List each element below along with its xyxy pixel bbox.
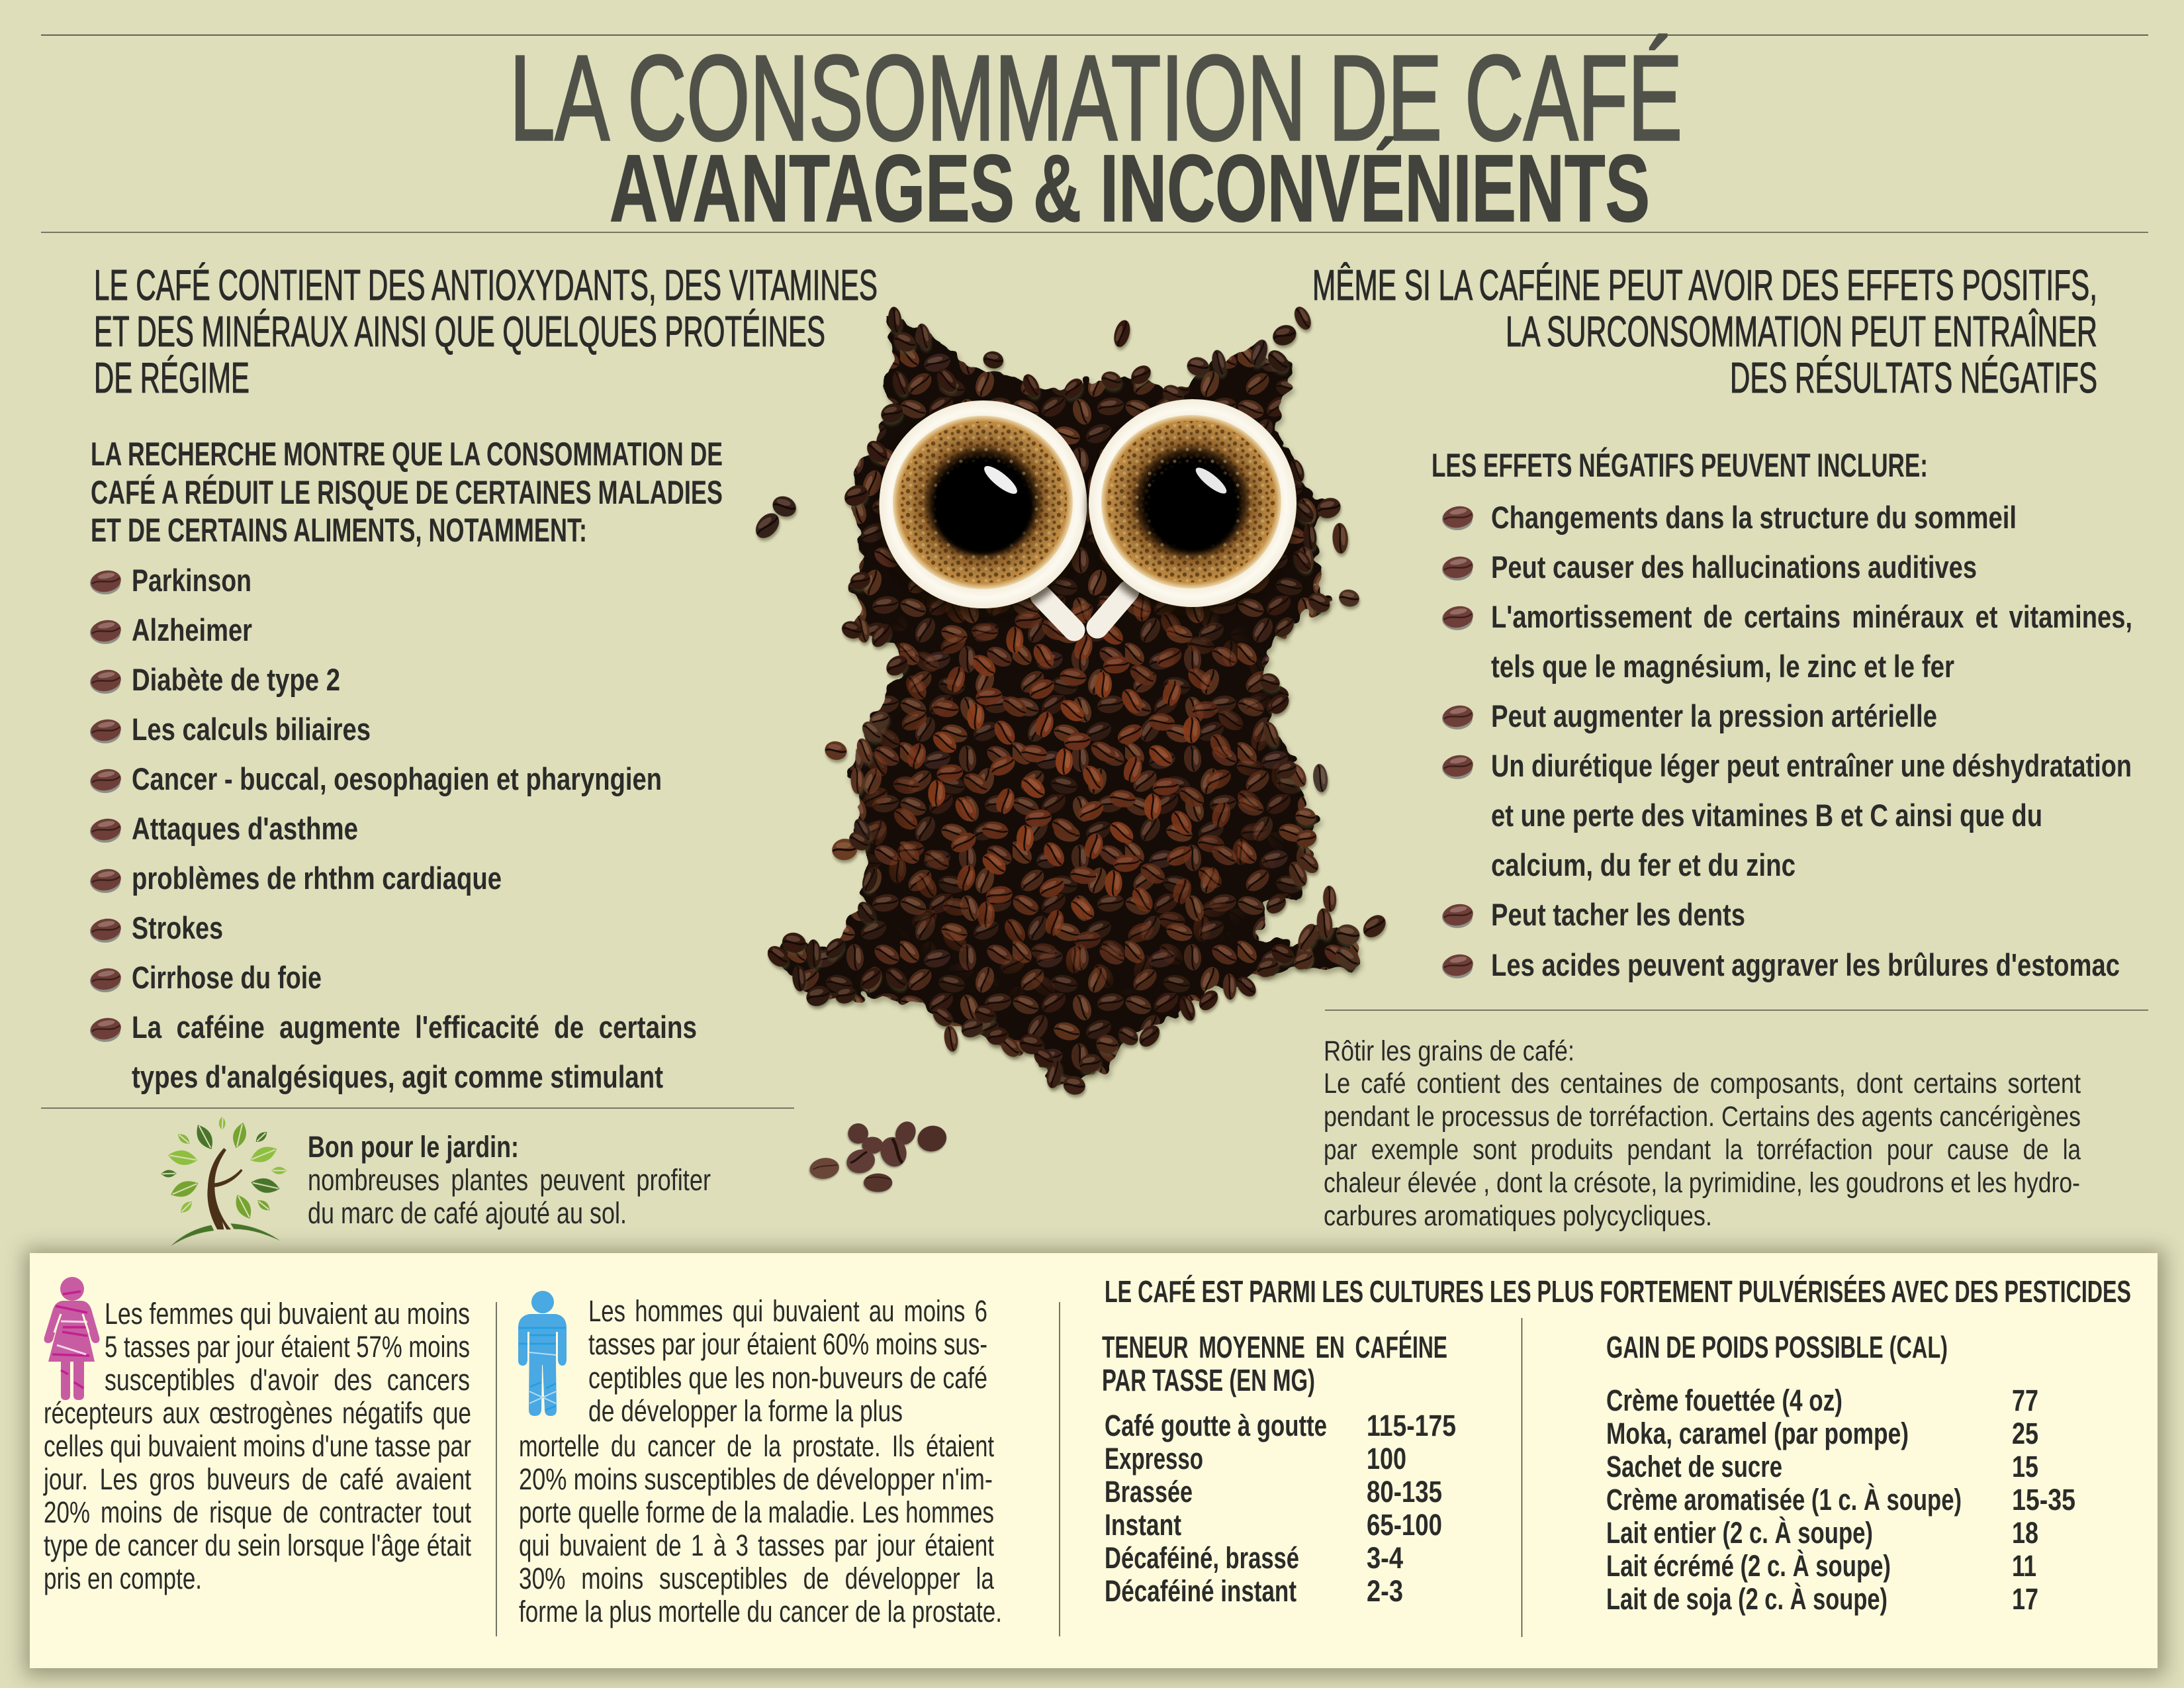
table: caffeine content: 115-175	[1367, 1409, 1456, 1442]
negative effects list: Peut tacher les dents	[1491, 897, 1745, 932]
benefits list: Cancer - buccal, oesophagien et pharyngien	[132, 761, 662, 796]
benefits list: La caféine augmente l'efficacité de certains	[132, 1009, 697, 1045]
negative effects list: Changements dans la structure du sommeil	[1491, 500, 2017, 535]
men text: tasses par jour étaient 60% moins sus-	[588, 1327, 987, 1361]
table: caffeine content: 3-4	[1367, 1541, 1403, 1575]
women text: récepteurs aux œstrogènes négatifs que	[44, 1396, 471, 1430]
men text	[519, 1294, 1002, 1628]
table: weight gain: Moka, caramel (par pompe)	[1606, 1417, 1909, 1450]
women text: type de cancer du sein lorsque l'âge était	[44, 1528, 471, 1562]
left heading: ET DES MINÉRAUX AINSI QUE QUELQUES PROTÉINES	[94, 307, 825, 355]
header band	[41, 30, 2148, 242]
table: weight gain: GAIN DE POIDS POSSIBLE (CAL)	[1606, 1330, 1948, 1364]
scattered beans	[752, 303, 1388, 1096]
negative effects heading: LES EFFETS NÉGATIFS PEUVENT INCLURE:	[1432, 447, 1928, 484]
table: weight gain: 15	[2012, 1450, 2038, 1483]
garden note: Bon pour le jardin:	[308, 1130, 519, 1164]
table: caffeine content: Brassée	[1105, 1475, 1193, 1509]
benefits list: Alzheimer	[132, 612, 252, 647]
table: weight gain: Lait de soja (2 c. À soupe)	[1606, 1582, 1888, 1616]
right column	[1312, 261, 2132, 982]
negative effects list: calcium, du fer et du zinc	[1491, 847, 1796, 882]
benefits list: Les calculs biliaires	[132, 712, 371, 747]
left heading: LE CAFÉ CONTIENT DES ANTIOXYDANTS, DES VITAMINES	[94, 261, 878, 309]
roasting text block	[1324, 1035, 2081, 1232]
table: weight gain: 25	[2012, 1417, 2038, 1450]
table: caffeine content: 65-100	[1367, 1508, 1442, 1542]
panel: bottom facts	[25, 1249, 2164, 1676]
table: caffeine content: TENEUR MOYENNE EN CAFÉINE	[1102, 1330, 1447, 1364]
women text: pris en compte.	[44, 1562, 202, 1595]
women text	[42, 1297, 471, 1595]
left heading	[94, 261, 878, 402]
women text: jour. Les gros buveurs de café avaient	[42, 1462, 471, 1496]
men text: ceptibles que les non-buveurs de café	[588, 1361, 987, 1395]
table: caffeine content	[1102, 1330, 1456, 1608]
table: caffeine content: Café goutte à goutte	[1105, 1409, 1327, 1442]
roasting text block: Rôtir les grains de café:	[1324, 1035, 1574, 1067]
left cup eye	[877, 400, 1089, 617]
table: weight gain	[1606, 1330, 2075, 1616]
cup handles	[1041, 591, 1128, 630]
table: weight gain: 17	[2012, 1582, 2038, 1616]
owl body	[780, 316, 1365, 1092]
table: caffeine content: Décaféiné instant	[1105, 1574, 1297, 1608]
negative effects list: tels que le magnésium, le zinc et le fer	[1491, 649, 1954, 684]
research intro: ET DE CERTAINS ALIMENTS, NOTAMMENT:	[91, 512, 587, 549]
negative effects list: Peut augmenter la pression artérielle	[1491, 698, 1937, 733]
negative effects list: Peut causer des hallucinations auditives	[1491, 549, 1977, 585]
table: weight gain: 77	[2012, 1383, 2038, 1417]
women text: 20% moins de risque de contracter tout	[44, 1495, 471, 1529]
negative effects list: et une perte des vitamines B et C ainsi que du	[1491, 798, 2042, 833]
garden note: du marc de café ajouté au sol.	[308, 1196, 627, 1230]
women text: 5 tasses par jour étaient 57% moins	[105, 1330, 470, 1364]
left column	[89, 261, 878, 1094]
research intro	[91, 436, 723, 549]
men text: mortelle du cancer de la prostate. Ils étaient	[519, 1429, 994, 1463]
research intro: CAFÉ A RÉDUIT LE RISQUE DE CERTAINES MALADIES	[91, 474, 723, 511]
benefits list: problèmes de rhthm cardiaque	[132, 861, 502, 896]
table: caffeine content: Expresso	[1105, 1442, 1203, 1476]
table: caffeine content: 80-135	[1367, 1475, 1442, 1509]
research intro: LA RECHERCHE MONTRE QUE LA CONSOMMATION DE	[91, 436, 723, 473]
table: caffeine content: Instant	[1105, 1508, 1181, 1542]
women text: celles qui buvaient moins d'une tasse par	[44, 1429, 471, 1463]
table: weight gain: Crème fouettée (4 oz)	[1606, 1383, 1843, 1417]
men text: de développer la forme la plus	[588, 1394, 903, 1428]
benefits list: types d'analgésiques, agit comme stimulant	[132, 1059, 663, 1094]
table: weight gain: 18	[2012, 1516, 2038, 1550]
icon: woman	[44, 1277, 99, 1400]
garden note	[308, 1130, 711, 1230]
left heading: DE RÉGIME	[94, 353, 250, 402]
benefits list: Strokes	[132, 910, 223, 945]
men text: porte quelle forme de la maladie. Les hommes	[519, 1495, 994, 1529]
table: weight gain: 11	[2012, 1549, 2036, 1583]
women text: susceptibles d'avoir des cancers	[105, 1363, 470, 1397]
table: caffeine content: 2-3	[1367, 1574, 1403, 1608]
benefits list: Attaques d'asthme	[132, 811, 358, 846]
benefits list: Parkinson	[132, 563, 251, 598]
men text: 20% moins susceptibles de développer n'im-	[519, 1462, 993, 1496]
icon: man	[518, 1291, 567, 1416]
table: weight gain: Crème aromatisée (1 c. À soupe)	[1606, 1483, 1962, 1517]
table: caffeine content: Décaféiné, brassé	[1105, 1541, 1299, 1575]
men text: qui buvaient de 1 à 3 tasses par jour étaient	[519, 1528, 994, 1562]
table: weight gain: Sachet de sucre	[1606, 1450, 1782, 1483]
men text: forme la plus mortelle du cancer de la prostate.	[519, 1595, 1002, 1628]
table: weight gain: 15-35	[2012, 1483, 2075, 1517]
men text: Les hommes qui buvaient au moins 6	[588, 1294, 987, 1328]
garden note: nombreuses plantes peuvent profiter	[308, 1163, 711, 1197]
illustration: coffee bean owl	[728, 265, 1456, 1192]
table: caffeine content: PAR TASSE (EN MG)	[1102, 1363, 1315, 1397]
women text: Les femmes qui buvaient au moins	[105, 1297, 470, 1331]
benefits list: Cirrhose du foie	[132, 960, 322, 995]
table: weight gain: Lait écrémé (2 c. À soupe)	[1606, 1549, 1891, 1583]
benefits list	[89, 563, 697, 1094]
subtitle: AVANTAGES & INCONVÉNIENTS	[610, 135, 1650, 242]
decorative loose beans	[808, 1118, 950, 1192]
table: caffeine content: 100	[1367, 1442, 1406, 1476]
benefits list: Diabète de type 2	[132, 662, 340, 697]
men text: 30% moins susceptibles de développer la	[519, 1562, 995, 1595]
right heading	[1312, 261, 2097, 402]
icon: tree	[161, 1117, 287, 1246]
negative effects list	[1441, 500, 2132, 982]
table: weight gain: Lait entier (2 c. À soupe)	[1606, 1516, 1873, 1550]
right cup eye	[1087, 399, 1298, 616]
roasting text block: carbures aromatiques polycycliques.	[1324, 1200, 1712, 1232]
